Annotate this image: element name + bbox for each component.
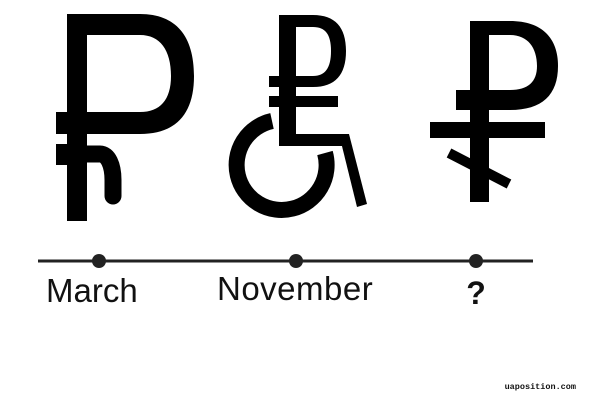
label: question mark: ? (466, 275, 486, 311)
dot: future (469, 254, 483, 268)
icon: ruble question (430, 21, 558, 202)
icon: ruble November wheelchair (237, 15, 367, 210)
dot: March (92, 254, 106, 268)
dot: November (289, 254, 303, 268)
icon: ruble March (56, 14, 194, 221)
timeline (38, 254, 533, 268)
watermark: uaposition.com (505, 382, 576, 392)
label: November: November (217, 270, 373, 307)
label: March: March (46, 272, 138, 309)
